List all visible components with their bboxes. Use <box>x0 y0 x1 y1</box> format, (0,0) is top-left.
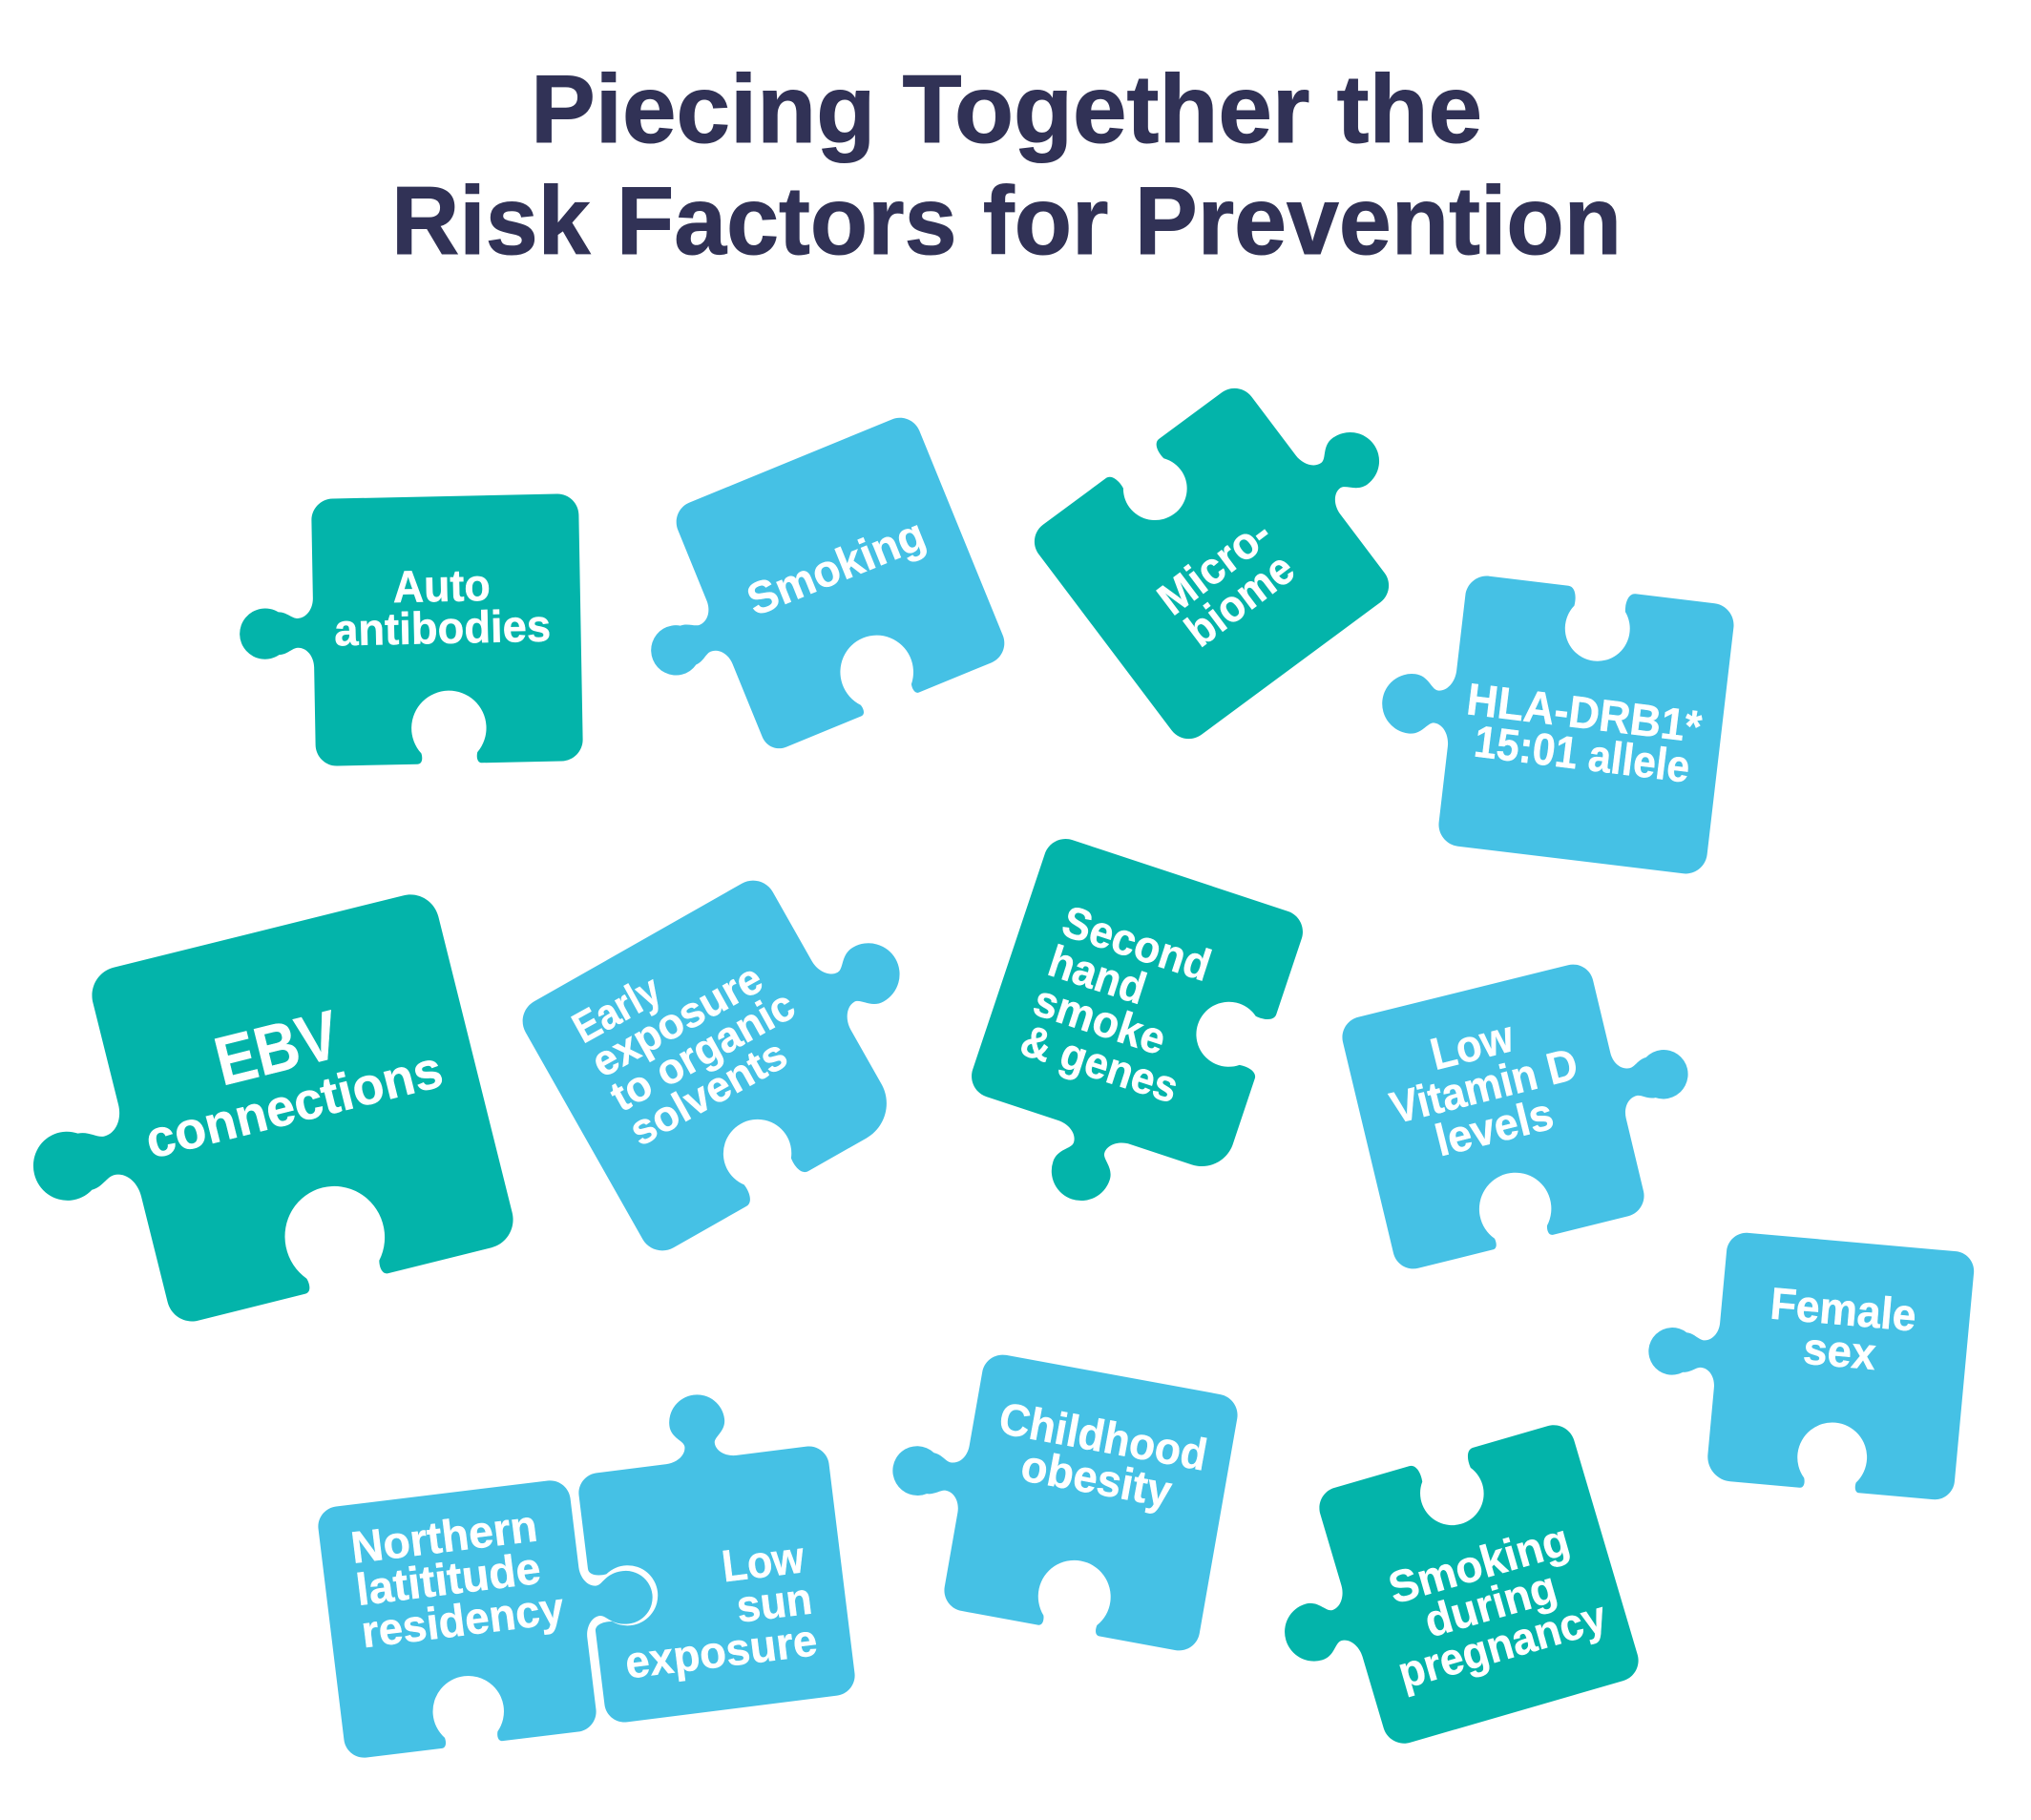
label <box>564 911 822 1155</box>
title <box>391 56 1622 275</box>
piece: Smoking during pregnancy <box>1248 1420 1644 1768</box>
label <box>1459 673 1705 793</box>
label: Childhood <box>995 1392 1211 1480</box>
label <box>333 558 552 655</box>
shape: blue puzzle piece with socket <box>569 1379 857 1725</box>
label: residency <box>359 1582 566 1657</box>
label <box>123 974 449 1170</box>
label: Low <box>719 1531 807 1591</box>
label: Vitamin D <box>1385 1038 1582 1133</box>
piece: Early exposure to organic solvents <box>514 836 965 1259</box>
label: Smoking <box>1383 1514 1575 1613</box>
piece: Low Vitamin D levels <box>1338 943 1717 1273</box>
piece: Northern latitude residency <box>316 1470 668 1760</box>
piece: Female sex <box>1637 1225 1976 1501</box>
shape: blue puzzle piece <box>1338 943 1717 1273</box>
label <box>1765 1277 1918 1382</box>
piece: EBV connections <box>0 889 519 1350</box>
shape: teal puzzle piece <box>238 493 583 768</box>
shape: blue puzzle piece <box>603 411 1011 782</box>
label: antibodies <box>334 600 552 655</box>
shape: teal puzzle piece <box>1248 1420 1644 1768</box>
label: smoke <box>1028 974 1172 1064</box>
label <box>988 1392 1211 1521</box>
label <box>1148 507 1306 658</box>
piece: Microbiome <box>1026 339 1453 747</box>
label: sun <box>734 1573 815 1632</box>
label: Female <box>1769 1277 1918 1341</box>
shape: teal puzzle piece <box>1026 339 1453 747</box>
shape: blue puzzle piece <box>1637 1225 1976 1501</box>
shape: teal puzzle piece <box>0 889 519 1350</box>
label: connections <box>139 1039 449 1170</box>
label <box>1374 996 1593 1175</box>
label: Northern <box>348 1499 540 1573</box>
piece: Second hand smoke and genes <box>944 833 1309 1242</box>
label: Second <box>1057 895 1217 991</box>
label: obesity <box>1017 1439 1176 1517</box>
piece: Auto antibodies <box>238 493 583 768</box>
label <box>348 1497 566 1657</box>
shape: blue puzzle piece <box>870 1338 1241 1654</box>
label: Smoking <box>740 508 932 625</box>
shape: blue puzzle piece <box>1367 565 1736 876</box>
label: EBV <box>207 996 346 1100</box>
title: Piecing Together the <box>531 56 1482 163</box>
label: biome <box>1175 542 1304 657</box>
label: latititude <box>353 1542 543 1615</box>
label: exposure <box>622 1614 820 1688</box>
label: & genes <box>1015 1015 1184 1113</box>
label: Micro- <box>1148 507 1281 624</box>
label: sex <box>1801 1323 1878 1379</box>
label: hand <box>1042 935 1153 1014</box>
label: exposure <box>583 953 770 1087</box>
label: to organic <box>602 980 803 1120</box>
shape: blue puzzle piece <box>316 1470 668 1760</box>
piece: Smoking <box>603 411 1011 782</box>
label: Low <box>1425 1010 1518 1079</box>
label: 15:01 allele <box>1472 716 1693 792</box>
label <box>1015 894 1224 1113</box>
shape: blue puzzle piece <box>514 836 965 1259</box>
shape: teal puzzle piece <box>944 833 1309 1242</box>
label: pregnancy <box>1392 1590 1612 1698</box>
label: during <box>1419 1561 1562 1646</box>
label: HLA-DRB1* <box>1464 673 1705 752</box>
label: levels <box>1430 1088 1559 1165</box>
piece: Low sun exposure <box>569 1379 857 1725</box>
label: Auto <box>392 559 491 612</box>
label: Early <box>564 965 669 1053</box>
label <box>612 1531 820 1688</box>
label: solvents <box>621 1029 795 1155</box>
label <box>1369 1510 1612 1698</box>
title: Risk Factors for Prevention <box>391 168 1622 275</box>
piece: HLA-DRB1 allele <box>1367 565 1736 876</box>
piece: Childhood obesity <box>870 1338 1241 1654</box>
